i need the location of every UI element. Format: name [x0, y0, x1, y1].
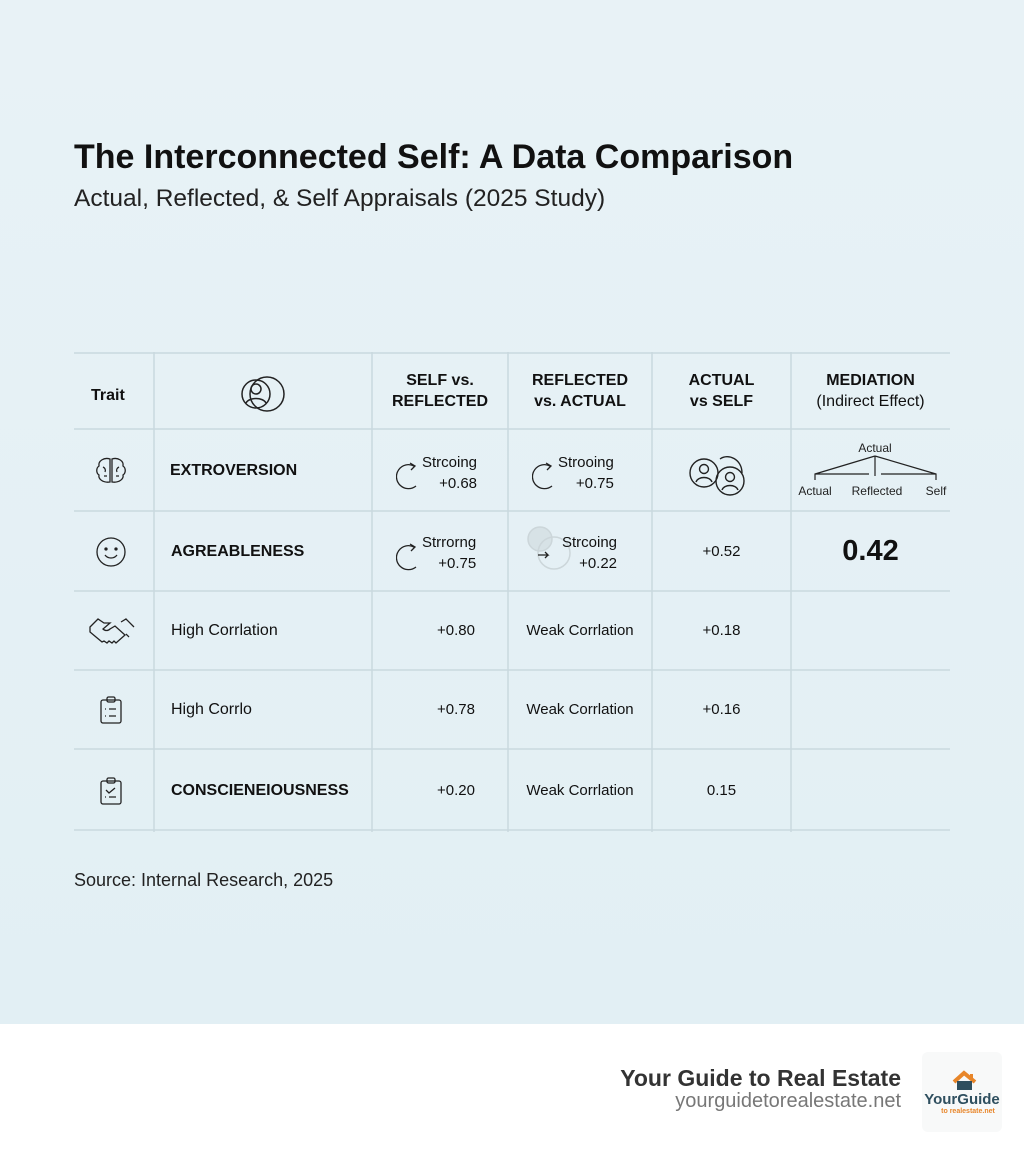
row: extroversion: Strcoing — [422, 454, 477, 471]
header row: REFLECTED — [392, 393, 488, 410]
row: conscientiousness: +0.20 — [437, 782, 475, 799]
row: extroversion: +0.68 — [439, 475, 477, 492]
row: high corrlation: +0.18 — [703, 622, 740, 639]
row: extroversion: EXTROVERSION — [170, 462, 297, 479]
row: agreeableness: 0.42 — [842, 535, 899, 567]
row: agreeableness: +0.52 — [703, 543, 740, 560]
header row: Trait — [91, 387, 125, 404]
mediation diagram: Actual — [858, 441, 892, 455]
mediation diagram: Reflected — [852, 484, 902, 498]
mediation diagram: Actual — [798, 484, 832, 498]
row: extroversion: Strooing — [558, 454, 614, 471]
logo — [922, 1052, 1002, 1132]
subtitle: Actual, Reflected, & Self Appraisals (2025 Study) — [74, 185, 605, 212]
mediation diagram: Self — [926, 484, 947, 498]
row: high corrlo — [100, 696, 740, 724]
logo: to realestate.net — [941, 1108, 996, 1115]
row: high corrlo: High Corrlo — [171, 701, 252, 718]
source note: Source: Internal Research, 2025 — [74, 870, 333, 890]
icon: brain — [96, 458, 126, 483]
footer — [0, 1024, 1024, 1154]
row: agreeableness — [96, 526, 899, 572]
header row: vs SELF — [690, 393, 753, 410]
footer: yourguidetorealestate.net — [675, 1090, 901, 1112]
logo: YourGuide — [924, 1091, 1000, 1108]
row: agreeableness: AGREABLENESS — [171, 543, 304, 560]
header row — [91, 372, 925, 412]
row: agreeableness: Strcoing — [562, 534, 617, 551]
icon: two people — [689, 456, 745, 496]
row: conscientiousness: CONSCIENEIOUSNESS — [171, 782, 349, 799]
row: high corrlation: Weak Corrlation — [526, 622, 634, 639]
row: high corrlation — [89, 618, 740, 644]
row: high corrlation: High Corrlation — [171, 622, 278, 639]
footer text: Your Guide to Real Estate — [620, 1065, 901, 1091]
icon: persona — [241, 376, 285, 412]
title: The Interconnected Self: A Data Comparison — [74, 138, 793, 176]
row: agreeableness: +0.22 — [579, 555, 617, 572]
row: high corrlation: +0.80 — [437, 622, 475, 639]
row: conscientiousness: 0.15 — [707, 782, 736, 799]
header row: ACTUAL — [689, 372, 754, 389]
header row: SELF vs. — [406, 372, 474, 389]
row: extroversion: +0.75 — [576, 475, 614, 492]
header row: (Indirect Effect) — [816, 393, 925, 410]
row: extroversion — [96, 441, 947, 498]
row: high corrlo: +0.78 — [437, 701, 475, 718]
row: agreeableness: +0.75 — [438, 555, 476, 572]
row: conscientiousness — [100, 777, 736, 805]
header row: vs. ACTUAL — [534, 393, 626, 410]
row: high corrlo: +0.16 — [703, 701, 740, 718]
mediation diagram — [798, 441, 947, 498]
row: agreeableness: Strrorng — [422, 534, 476, 551]
table — [74, 352, 950, 832]
row: high corrlo: Weak Corrlation — [526, 701, 634, 718]
row: conscientiousness: Weak Corrlation — [526, 782, 634, 799]
header row: REFLECTED — [532, 372, 628, 389]
header row: MEDIATION — [826, 372, 915, 389]
